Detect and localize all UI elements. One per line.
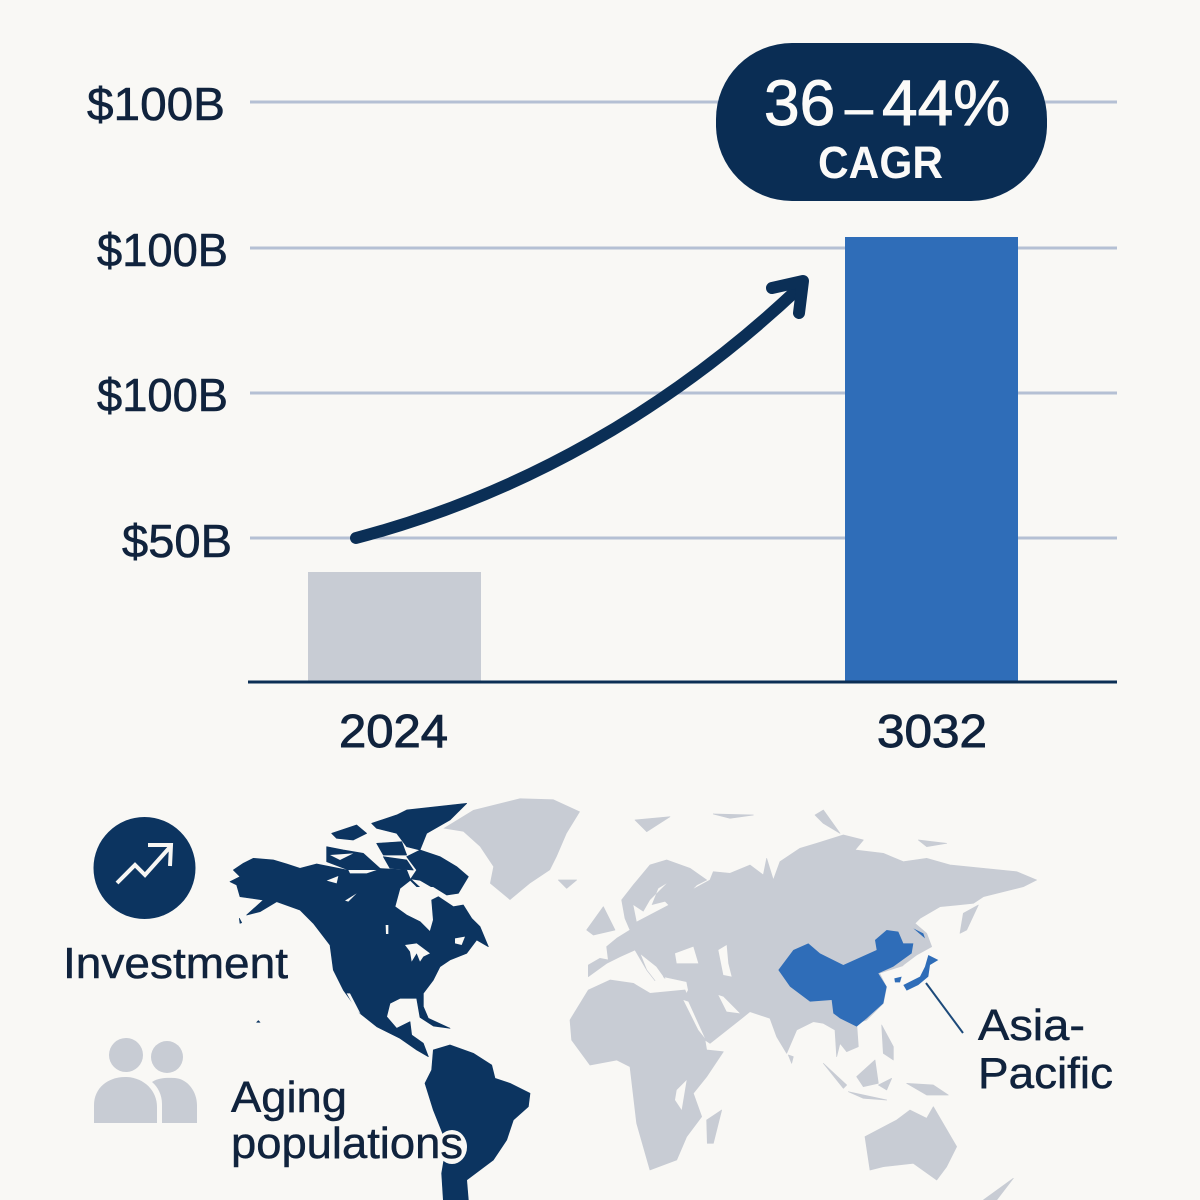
map: China (highlighted) (778, 930, 913, 1027)
CAGR callout pill: 44% (882, 67, 1010, 139)
y-axis labels: $100B (97, 369, 228, 421)
map: Americas (highlighted) (230, 803, 530, 1200)
label: Asia-Pacific: Asia- (978, 1001, 1085, 1050)
map: Greenland (443, 798, 580, 900)
CAGR callout pill: – (845, 80, 873, 136)
bar: 2024 (308, 572, 481, 681)
x-axis labels: 2024 (339, 705, 448, 757)
x-axis labels: 3032 (877, 705, 987, 757)
map: lakes and bays (327, 853, 465, 1014)
map: inland seas (633, 883, 927, 1110)
icon: investment trend (94, 817, 196, 919)
map: Japan and Korea (highlighted) (894, 928, 938, 991)
label: Aging populations (231, 1073, 467, 1168)
label: Aging populations: populations (231, 1119, 463, 1168)
y-axis labels: $50B (122, 515, 232, 567)
map: Eurasia, Africa, Oceania (558, 810, 1037, 1200)
label: Asia-Pacific: Pacific (978, 1049, 1113, 1098)
CAGR callout pill: 36 (764, 67, 835, 139)
world map (230, 798, 1037, 1200)
growth arrow (356, 281, 803, 538)
y-axis labels: $100B (97, 224, 228, 276)
icon: aging populations people (94, 1038, 197, 1123)
label: Asia-Pacific (978, 1001, 1113, 1098)
bar: 2032 forecast (845, 237, 1018, 681)
y-axis labels: $100B (87, 78, 225, 130)
CAGR callout pill (716, 43, 1047, 201)
leader line to Asia-Pacific (926, 983, 963, 1033)
y-axis labels (87, 78, 232, 567)
x-axis labels (339, 705, 987, 757)
label: Aging populations: Aging (231, 1073, 347, 1122)
CAGR callout pill: CAGR (818, 137, 943, 188)
label: Investment: Investment (63, 939, 288, 988)
